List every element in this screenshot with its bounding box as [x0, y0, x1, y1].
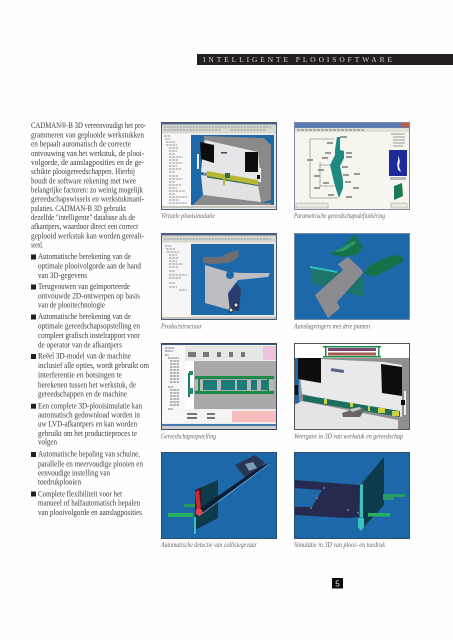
bullet: 3D-model: interferentie en botsingen te — [38, 370, 122, 380]
intro paragraph: schikte plooigereedschappen. Hierbij — [31, 167, 135, 176]
bullet: gereedschapsopstelling: compleet grafisch instelrapport voor — [38, 331, 140, 340]
screenshot: product structure — [161, 233, 277, 320]
caption: simulatie in 3D: Simulatie in 3D van plooi- en toedruk — [294, 540, 386, 549]
screenshot: bending and bottoming simulation — [294, 452, 410, 539]
bullet: gereedschapsopstelling: optimale gereedschapsopstelling en — [38, 322, 141, 331]
bullet: gereedschapsopstelling: de operator van de afkantpers — [38, 340, 122, 350]
intro paragraph: volgorde, de aanslagposities en de ge- — [31, 158, 144, 167]
bullet: schuine plooien: toedrukplooien — [38, 478, 82, 487]
bullet: 3D-plooisimulatie — [31, 402, 143, 447]
bullet: 3D-plooisimulatie: automatisch gedownload worden in — [38, 410, 141, 420]
intro paragraph: CADMAN®-B 3D vereenvoudigt het pro- — [31, 121, 146, 130]
bullet: terugvouwen — [31, 282, 140, 310]
intro paragraph: gereedschapswissels en werkstukmani- — [31, 195, 144, 204]
bullet: terugvouwen: ontvouwde 2D-ontwerpen op basis — [38, 292, 140, 300]
bullet: 3D-model — [31, 352, 149, 398]
caption: aanslagvingers met drie punten: Aanslagvingers met drie punten — [293, 322, 370, 330]
bullet: flexibiliteit: Complete flexibiliteit voor het — [38, 490, 123, 498]
intro paragraph: en bepaalt automatisch de correcte — [31, 140, 131, 149]
intro paragraph: houdt de software rekening met twee — [31, 176, 136, 185]
intro paragraph: dezelfde "intelligente" database als de — [31, 213, 135, 222]
intro paragraph — [31, 121, 146, 250]
bullet: terugvouwen: Terugvouwen van geïmporteerde — [38, 282, 130, 291]
screenshot: parametric tool definition — [294, 122, 410, 210]
bullet: 3D-model: gereedschappen en de machine — [38, 390, 127, 398]
bullet: 3D-model: Reëel 3D-model van de machine — [38, 352, 131, 360]
page number — [332, 578, 343, 588]
header bar: section title — [197, 54, 453, 65]
header bar: section title: INTELLIGENTE PLOOISOFTWARE — [203, 55, 392, 64]
intro paragraph: afkantpers, waardoor direct een correct — [31, 222, 139, 231]
bullet: 3D-model: berekenen tussen het werkstuk, de — [38, 380, 136, 390]
bullet: flexibiliteit: manueel of halfautomatisch bepalen — [38, 499, 141, 508]
bullet: plooivolgorde: optimale plooivolgorde aan de hand — [38, 261, 142, 270]
screenshot: virtual bending simulation — [161, 122, 277, 210]
intro paragraph: seerd. — [31, 240, 43, 250]
bullet: 3D-plooisimulatie: volgen — [38, 438, 58, 447]
bullet: schuine plooien: eenvoudige instelling van — [38, 469, 111, 478]
bullet: plooivolgorde: Automatische berekening van de — [38, 252, 131, 261]
bullet: 3D-model: inclusief alle opties, wordt gebruikt om — [38, 361, 149, 370]
caption: virtuele plooisimulatie: Virtuele plooisimulatie — [161, 211, 216, 220]
bullet: plooivolgorde — [31, 252, 142, 280]
intro paragraph: pulaties. CADMAN-B 3D gebruikt — [31, 204, 127, 213]
caption: automatische detectie: Automatische detectie van collisiegevaar — [160, 540, 257, 549]
bullet: terugvouwen: van de plooitechnologie — [38, 301, 105, 310]
intro paragraph: geplooid werkstuk kan worden gereali- — [31, 231, 144, 240]
bullet: 3D-plooisimulatie: gebruikt om het productieproces te — [38, 429, 137, 438]
bullet: gereedschapsopstelling — [31, 312, 141, 350]
page number: 5 — [335, 580, 340, 588]
intro paragraph: ontvouwing van het werkstuk, de plooi- — [31, 149, 144, 158]
bullet: plooivolgorde: van 3D-gegevens — [38, 271, 87, 280]
screenshot: back-gauge fingers with three points — [294, 233, 410, 320]
bullet: flexibiliteit — [31, 490, 142, 517]
intro paragraph: belangrijke factoren: zo weinig mogelijk — [31, 186, 144, 194]
caption: parametrische gereedschapsdefinitiëring: Parametrische gereedschapsdefinitiëring — [293, 211, 385, 220]
screenshot: collision detection — [161, 452, 277, 539]
bullet: flexibiliteit: van plooivolgorde en aanslagposities — [38, 508, 142, 517]
caption: weergave in 3D: Weergave in 3D van werkstuk en gereedschap — [294, 432, 403, 440]
caption: gereedschapsopstelling: Gereedschapsopstelling — [161, 432, 216, 440]
bullet: gereedschapsopstelling: Automatische berekening van de — [38, 312, 131, 321]
caption: productstructuur: Productstructuur — [160, 322, 202, 330]
screenshot: 3D view of workpiece and tooling — [294, 343, 410, 430]
bullet: schuine plooien — [31, 450, 144, 487]
bullet: 3D-plooisimulatie: uw LVD-afkantpers en kan worden — [38, 420, 138, 429]
intro paragraph: grammeren van geplooide werkstukken — [31, 130, 145, 139]
bullet: 3D-plooisimulatie: Een complete 3D-plooisimulatie kan — [38, 402, 143, 410]
screenshot: tool setup — [161, 343, 277, 430]
bullet: schuine plooien: Automatische bepaling van schuine, — [38, 450, 140, 459]
bullet: schuine plooien: parallelle en meervoudige plooien en — [38, 460, 144, 468]
